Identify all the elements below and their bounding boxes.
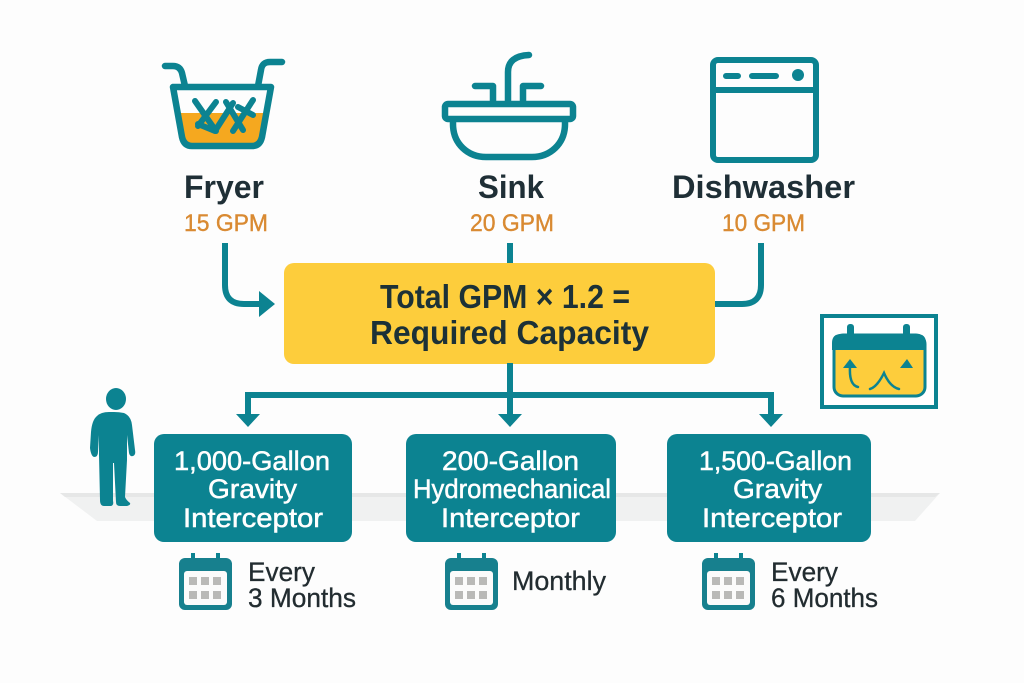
schedule: every 6 months: Every: [771, 557, 838, 587]
schedule: monthly: Monthly: [512, 566, 606, 596]
label: Fryer: Fryer: [184, 169, 264, 205]
arrow: dishwasher to formula: [712, 243, 761, 304]
schedule: every 3 months: Every: [248, 557, 315, 587]
interceptor: 200-gallon hydromechanical: [406, 434, 616, 542]
icon: calendar 1: [179, 553, 232, 610]
arrows: formula to interceptors: [236, 363, 783, 427]
schedule: every 3 months: [248, 557, 356, 613]
interceptor: 1,000-gallon gravity: [154, 434, 352, 542]
icon: sink: [445, 55, 573, 157]
formula line 2: Required Capacity: [370, 314, 650, 351]
input: dishwasher: [672, 60, 855, 205]
formula box: [284, 263, 715, 364]
interceptor: 200-gallon hydromechanical: Interceptor: [441, 503, 580, 533]
schedule: every 6 months: 6 Months: [771, 583, 878, 613]
interceptor: 1,500-gallon gravity: Gravity: [733, 474, 823, 504]
schedule: every 6 months: [771, 557, 878, 613]
icon: dishwasher: [713, 60, 816, 160]
interceptor: 1,500-gallon gravity: [667, 434, 871, 542]
arrow: fryer to formula: [225, 243, 275, 317]
icon: fryer basket: [165, 62, 282, 146]
input: sink: [445, 55, 573, 205]
icon: calendar 3: [702, 553, 755, 610]
interceptor: 200-gallon hydromechanical: 200-Gallon: [442, 446, 579, 476]
floor band: [60, 493, 940, 521]
input: fryer: [165, 62, 282, 205]
interceptor: 1,000-gallon gravity: 1,000-Gallon: [174, 446, 330, 476]
interceptor: 1,500-gallon gravity: 1,500-Gallon: [699, 446, 852, 476]
schedule: every 3 months: 3 Months: [248, 583, 356, 613]
icon: tank calendar: [822, 316, 936, 407]
icon: person: [90, 388, 135, 506]
interceptor: 1,000-gallon gravity: Interceptor: [183, 503, 323, 533]
formula line 1: Total GPM × 1.2 =: [380, 278, 630, 315]
interceptor: 200-gallon hydromechanical: Hydromechanical: [413, 474, 611, 504]
arrow: sink to formula: [507, 243, 513, 264]
interceptor: 1,500-gallon gravity: Interceptor: [702, 503, 842, 533]
label: Sink: Sink: [478, 169, 544, 205]
icon: calendar 2: [445, 553, 498, 610]
label: Dishwasher: Dishwasher: [672, 169, 855, 205]
flow: 20 GPM: 20 GPM: [470, 210, 554, 237]
interceptor: 1,000-gallon gravity: Gravity: [208, 474, 298, 504]
flow: 15 GPM: 15 GPM: [184, 210, 268, 237]
flow: 10 GPM: 10 GPM: [722, 210, 805, 237]
